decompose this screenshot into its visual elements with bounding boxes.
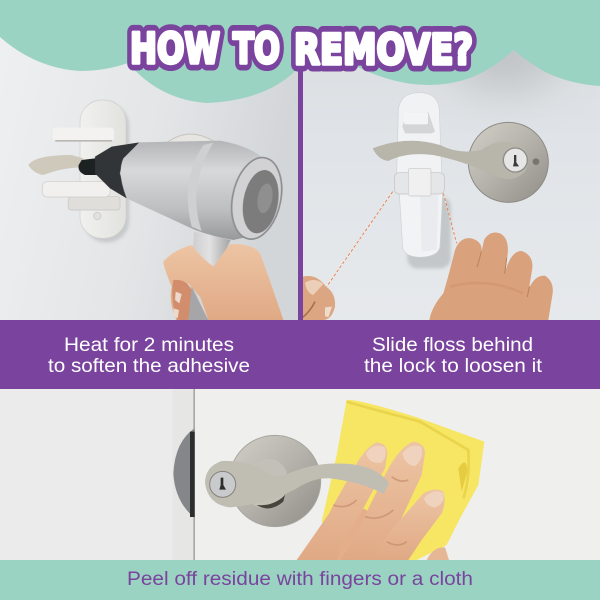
door lever bbox=[28, 155, 83, 175]
right hand bbox=[429, 232, 553, 320]
title: HOW bbox=[130, 24, 220, 73]
fingernails bbox=[366, 445, 444, 507]
lock shadow bbox=[407, 197, 451, 268]
caption: floss: the lock to loosen it bbox=[364, 356, 543, 377]
door lever bbox=[205, 461, 389, 507]
title bbox=[130, 24, 473, 74]
dryer rim and mesh bbox=[230, 156, 283, 240]
child lock plate bbox=[394, 93, 444, 257]
title: REMOVE? bbox=[294, 25, 473, 74]
fingers bbox=[297, 442, 449, 560]
caption: peel: Peel off residue with fingers or a cloth bbox=[127, 569, 473, 590]
door frame edge bbox=[172, 385, 195, 562]
index finger bbox=[297, 442, 387, 560]
latch plate bbox=[173, 428, 194, 518]
panel: flossing behind the lock bbox=[303, 50, 600, 320]
purple caption band bbox=[0, 320, 600, 389]
middle finger bbox=[367, 442, 425, 532]
ring finger bbox=[392, 490, 445, 560]
left fingers holding floss bbox=[303, 276, 335, 320]
panel: wiping residue with a cloth bbox=[0, 385, 600, 562]
divider between photos bbox=[298, 60, 303, 322]
door knob rosette bbox=[229, 435, 321, 527]
key cylinder bbox=[210, 471, 236, 497]
title: TO bbox=[233, 24, 280, 73]
teal caption band bbox=[0, 560, 600, 600]
dryer silver body bbox=[120, 140, 261, 240]
caption: heat: to soften the adhesive bbox=[48, 356, 250, 377]
dryer black cone bbox=[95, 142, 139, 198]
teal cloud header bbox=[0, 0, 600, 103]
door knob rosette bbox=[468, 122, 548, 202]
hand holding dryer bbox=[163, 244, 283, 320]
dryer handle bbox=[188, 232, 231, 320]
caption: floss bbox=[364, 335, 543, 377]
door lever bbox=[373, 141, 528, 179]
yellow cloth bbox=[322, 400, 484, 562]
caption: floss: Slide floss behind bbox=[372, 335, 533, 356]
title: HOW bbox=[130, 24, 220, 73]
knuckle creases bbox=[333, 477, 408, 545]
caption: heat bbox=[48, 335, 250, 377]
child lock plate bbox=[42, 100, 129, 242]
caption: heat: Heat for 2 minutes bbox=[64, 335, 234, 356]
dryer nozzle bbox=[78, 158, 97, 175]
pinkie tip bbox=[427, 547, 449, 560]
key cylinder bbox=[503, 148, 527, 172]
title: TO bbox=[233, 24, 280, 73]
floss strand bbox=[327, 192, 457, 287]
title: REMOVE? bbox=[294, 25, 473, 74]
back of hand bbox=[296, 509, 367, 560]
small screw hole bbox=[533, 158, 539, 165]
panel: hair dryer heating the lock bbox=[0, 37, 298, 320]
door knob rosette behind dryer bbox=[167, 134, 214, 142]
